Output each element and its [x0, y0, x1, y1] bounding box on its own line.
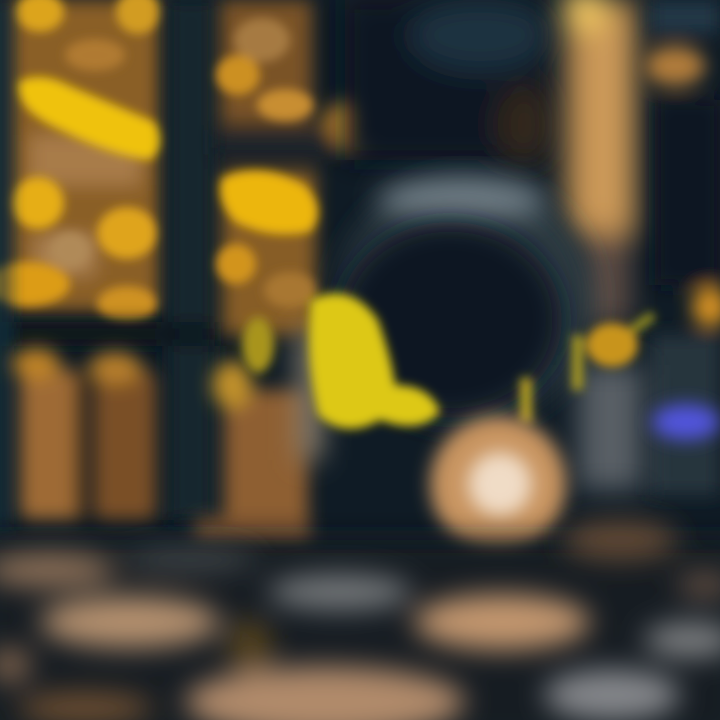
panel: top right details — [645, 0, 720, 495]
icon: blue glow — [652, 404, 720, 440]
panel: top dark background — [345, 0, 553, 165]
panel: lower left gold columns — [12, 348, 156, 520]
table base — [0, 540, 720, 720]
icon: glowing coin — [430, 416, 566, 552]
panel: bottom coin table — [0, 520, 720, 720]
table coins — [0, 520, 720, 720]
icon: crystal ball — [337, 178, 593, 422]
panel: gold bars on left shelf — [0, 0, 161, 322]
panel: left gold shelf — [10, 0, 160, 312]
panel: centre gold bars — [216, 18, 318, 308]
chart: yellow rising line — [242, 293, 656, 429]
panel: lower centre gold column — [195, 361, 310, 546]
panel: dark shelf frame — [0, 0, 215, 530]
coin body — [430, 416, 566, 552]
panel: ball right side glass — [298, 330, 643, 490]
panel: centre gold shelf — [215, 0, 372, 335]
crystal ball dark core — [338, 222, 562, 418]
panel: glowing amber pillar — [561, 0, 637, 325]
crystal ball highlight — [377, 178, 547, 222]
coin glow — [468, 452, 532, 516]
crystal ball glass — [337, 178, 593, 422]
